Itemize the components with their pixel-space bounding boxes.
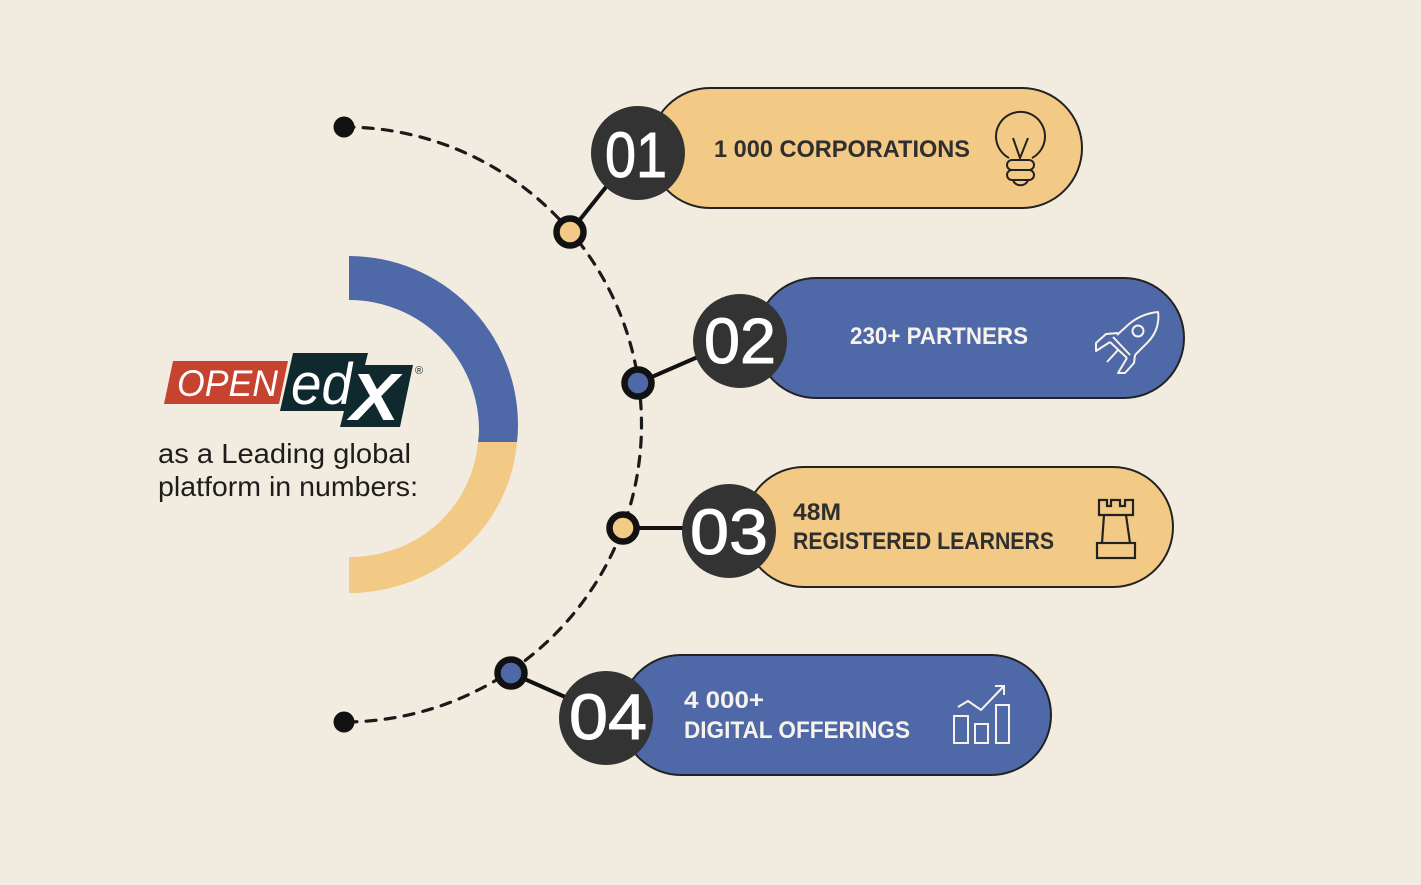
- logo: Open edX: [164, 352, 423, 435]
- logo: Open edX: OPEN: [177, 363, 278, 404]
- item 03: [610, 467, 1173, 587]
- item 03: 48M: [793, 499, 841, 526]
- logo: Open edX: ®: [415, 365, 423, 377]
- logo: Open edX: X: [346, 360, 404, 435]
- item 03: REGISTERED LEARNERS: [793, 528, 1054, 555]
- dashed arc: [344, 127, 642, 722]
- item 03: 03: [690, 496, 768, 568]
- icon: growth chart: [954, 686, 1009, 743]
- item 01: 01: [605, 119, 667, 191]
- item 04: 04: [569, 681, 647, 753]
- arc end dot: top: [334, 116, 354, 138]
- item 04: [498, 655, 1051, 775]
- item 02: 02: [704, 305, 776, 377]
- item 04: DIGITAL OFFERINGS: [684, 717, 910, 744]
- item 02: 230+ PARTNERS: [850, 323, 1028, 350]
- intro text: [158, 438, 418, 502]
- icon: chess rook: [1097, 500, 1135, 558]
- intro text: as a Leading global: [158, 438, 411, 469]
- item 02: [624, 278, 1184, 398]
- item 01: 1 000 CORPORATIONS: [714, 136, 970, 163]
- donut: half ring: [349, 256, 518, 593]
- item 01: [556, 88, 1082, 246]
- logo: Open edX: ed: [291, 352, 354, 417]
- icon: rocket: [1096, 312, 1158, 373]
- item 04: 4 000+: [684, 687, 764, 714]
- arc end dot: bottom: [334, 712, 354, 732]
- intro text: platform in numbers:: [158, 471, 418, 502]
- icon: light bulb: [996, 112, 1045, 185]
